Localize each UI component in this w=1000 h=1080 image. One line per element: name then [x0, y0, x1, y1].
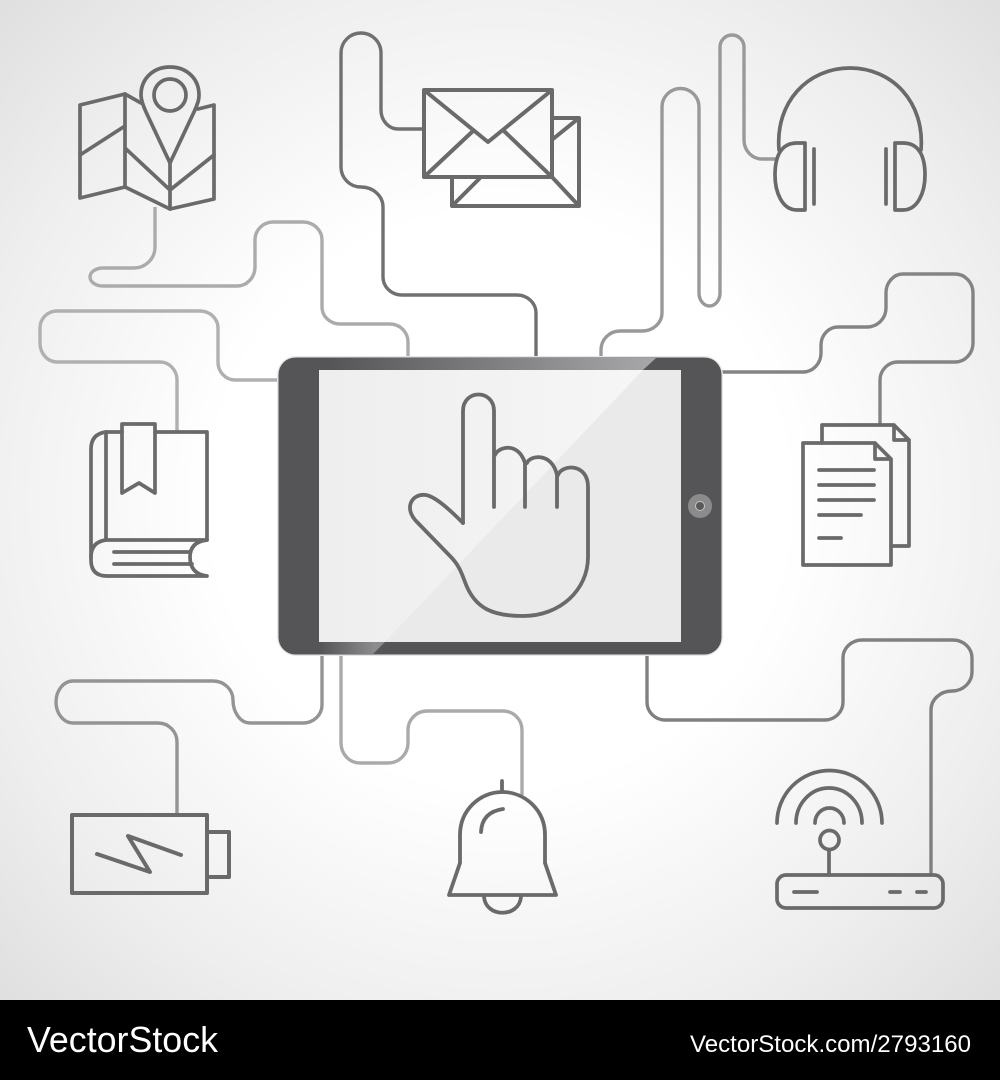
home button — [688, 494, 712, 518]
icon: battery — [72, 815, 229, 893]
cable: email to tablet — [341, 33, 536, 356]
footer image reference: VectorStock.com/2793160 — [690, 1031, 971, 1058]
tablet — [277, 356, 723, 656]
cable: headphones to tablet — [601, 35, 776, 356]
icon: documents — [803, 425, 909, 565]
cable: bell to tablet — [341, 656, 522, 795]
footer brand: VectorStock — [27, 1019, 219, 1060]
cable: book to tablet — [40, 311, 277, 431]
icon: book with bookmark — [91, 424, 207, 576]
icon: envelopes — [424, 90, 579, 206]
icon: wifi router — [777, 771, 943, 908]
icon: headphones — [775, 68, 925, 210]
cable: router to tablet — [647, 640, 972, 876]
tablet top bezel glare — [330, 358, 656, 370]
connecting cables — [40, 33, 973, 876]
screen glass reflection — [319, 370, 643, 642]
icon: map with pin — [80, 67, 214, 209]
footer bar — [0, 1000, 1000, 1080]
icon: pointing hand — [410, 394, 588, 616]
tablet screen — [319, 370, 681, 642]
cable: documents to tablet — [722, 274, 973, 424]
cable: map to tablet — [90, 207, 408, 356]
tablet body — [277, 356, 723, 656]
cable: battery to tablet — [56, 656, 322, 815]
tablet bottom bezel glare — [319, 642, 385, 654]
icon: bell — [449, 781, 556, 913]
